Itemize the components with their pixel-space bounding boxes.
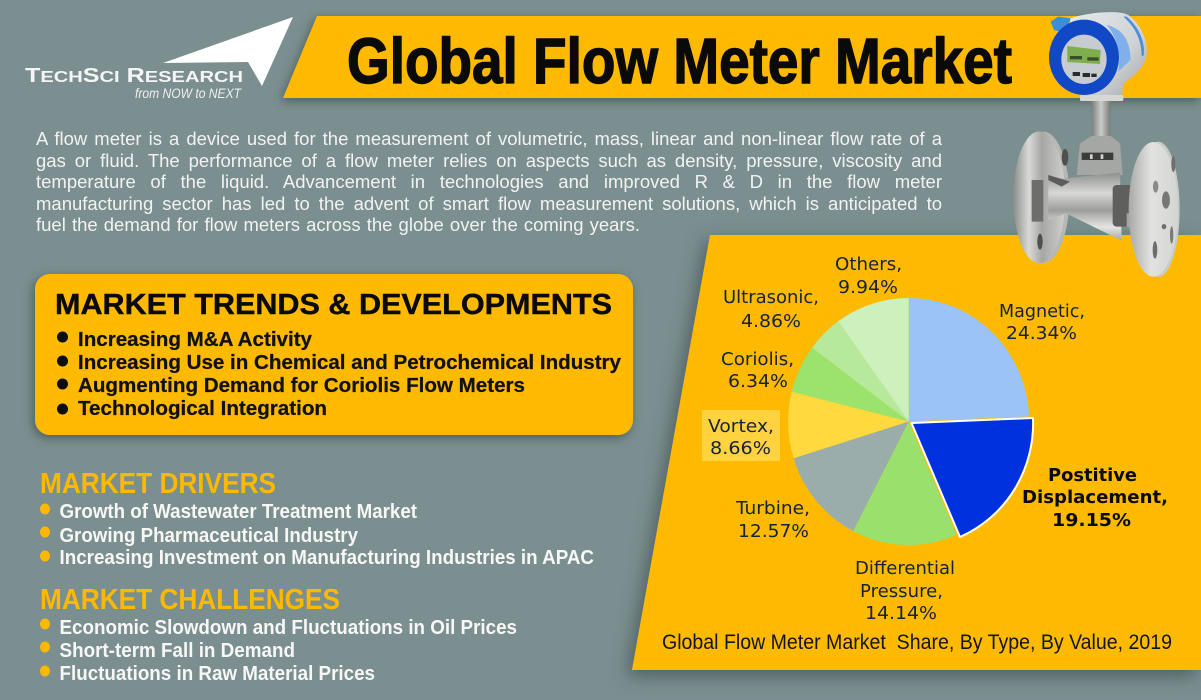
device right flange [1137,142,1180,277]
label: Positive Displacement: 19.15% [1052,511,1131,531]
section: market challenges [40,584,517,685]
trends list: Augmenting Demand for Coriolis Flow Meters [78,375,525,397]
challenges list: Fluctuations in Raw Material Prices [60,663,375,685]
device LCD display [1067,46,1101,77]
slice: Positive Displacement [912,418,1033,537]
label: Positive Displacement [1022,466,1168,531]
drivers list: Growth of Wastewater Treatment Market [60,501,417,523]
pie chart [788,298,1033,545]
label: Differential Pressure: 14.14% [865,604,937,624]
slice: Ultrasonic [812,321,909,422]
slice: Others [838,298,909,422]
challenges list: Economic Slowdown and Fluctuations in Oil Prices [60,617,517,639]
logo: TechSci Research [25,17,293,101]
icon: paper plane arrow [163,17,293,86]
device blue ring [1049,20,1119,95]
section: market drivers [40,468,594,569]
device right coupling [1113,185,1133,227]
slice: Vortex [788,392,909,458]
drivers list: Increasing Investment on Manufacturing Industries in APAC [60,547,594,569]
label: Positive Displacement: Postitive [1048,466,1137,486]
label: Magnetic: 24.34% [1006,324,1077,344]
description paragraph [36,128,942,240]
slice: Coriolis [792,348,909,422]
description paragraph: A flow meter is a device used for the measurement of volumetric, mass, linear and non-linear flow rate of a [36,128,942,149]
challenges list: Short-term Fall in Demand [60,640,295,662]
label: Vortex: 8.66% [710,439,771,459]
slice: Differential Pressure [853,422,957,545]
label: Others [835,255,902,298]
chart caption: Global Flow Meter Market Share, By Type, By Value, 2019 [662,631,1172,654]
panel: pie chart background [632,235,1201,670]
title: Global Flow Meter Market [347,25,1012,97]
label: Ultrasonic: Ultrasonic, [723,288,819,308]
challenges heading: MARKET CHALLENGES [40,584,340,616]
drivers list [40,501,594,569]
panel: market trends and developments [35,274,633,435]
description paragraph: manufacturing sector has led to the advent of smart flow measurement solutions, which is anticipated to [36,192,942,214]
label: Turbine: 12.57% [738,522,809,542]
trends list [57,329,622,420]
device neck [1092,100,1111,150]
label: Ultrasonic: 4.86% [741,312,801,332]
device transmitter housing [1070,12,1147,97]
label: Differential Pressure [855,559,955,624]
device left flange [1017,132,1069,263]
label: Ultrasonic [723,288,819,332]
logo tagline: from NOW to NEXT [135,85,242,101]
slice: Magnetic [909,298,1029,422]
trends list: Technological Integration [78,398,327,420]
drivers list: Growing Pharmaceutical Industry [60,525,359,547]
description paragraph: fuel the demand for flow meters across the globe over the coming years. [36,214,640,235]
logo wordmark: TECH SCI R ESEARCH [25,65,243,87]
trends list: Increasing Use in Chemical and Petrochemical Industry [78,352,622,374]
label: Differential Pressure: Differential [855,559,955,579]
label: Positive Displacement: Displacement, [1022,488,1168,508]
description paragraph: gas or fluid. The performance of a flow meter relies on aspects such as density, pressure, viscosity and [36,150,942,170]
label: Coriolis [721,350,794,392]
label: Coriolis: Coriolis, [721,350,794,370]
label: Vortex [702,410,780,461]
title banner [283,16,1201,98]
device pipe body [1048,173,1122,241]
slice: Turbine [794,422,909,531]
description paragraph: temperature of the liquid. Advancement in technologies and improved R & D in the flow meter [36,171,942,192]
label: Magnetic [999,302,1085,344]
challenges list [40,617,517,685]
label: Vortex: Vortex, [708,417,774,437]
icon: flow meter device [1013,12,1180,277]
trends heading: MARKET TRENDS & DEVELOPMENTS [55,289,612,321]
label: Differential Pressure: Pressure, [860,582,943,602]
label: Turbine: Turbine, [735,499,810,519]
label: Coriolis: 6.34% [728,372,788,392]
device mounting block [1077,136,1123,175]
label: Others: 9.94% [838,278,898,298]
label: Magnetic: Magnetic, [999,302,1085,322]
drivers heading: MARKET DRIVERS [40,468,276,500]
trends list: Increasing M&A Activity [78,329,313,351]
device collar [1080,95,1123,101]
label: Turbine [735,499,810,542]
device blue cap [1051,17,1071,32]
label: Others: Others, [835,255,902,275]
